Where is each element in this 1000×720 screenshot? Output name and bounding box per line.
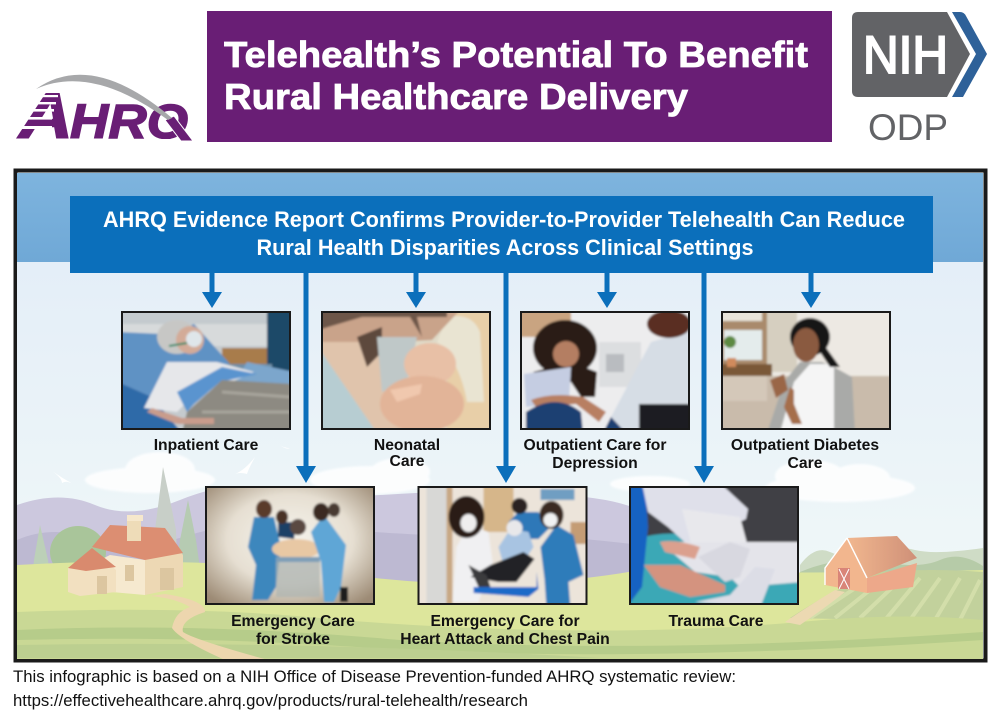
title banner: Telehealth’s Potential To Benefit [224, 34, 808, 75]
arrow: to emergency heart care [496, 273, 516, 483]
logo: AHRQ: HRQ [70, 96, 188, 149]
title banner: Rural Healthcare Delivery [224, 76, 688, 117]
photo: neonatal care [318, 308, 494, 433]
arrow: to inpatient care [202, 273, 222, 308]
label: outpatient diabetes care: Outpatient Diabetes [731, 437, 879, 454]
photo: trauma care [626, 483, 802, 608]
footer source note: https://effectivehealthcare.ahrq.gov/products/rural-telehealth/research [13, 691, 528, 710]
logo: NIH ODP [852, 12, 987, 148]
label: outpatient care for depression: Depression [552, 455, 638, 472]
header banner [70, 196, 933, 273]
photo: outpatient diabetes care [718, 308, 894, 433]
photo: emergency care for heart attack and chest pain [414, 483, 590, 608]
label: inpatient care: Inpatient Care [154, 437, 259, 454]
label: emergency care for heart attack and chest pain: Heart Attack and Chest Pain [400, 631, 610, 648]
label: emergency care for heart attack and chest pain: Emergency Care for [430, 613, 580, 630]
label: emergency care for stroke: Emergency Care [231, 613, 355, 630]
label: outpatient diabetes care: Care [788, 455, 823, 472]
logo: AHRQ [16, 74, 192, 140]
title banner [207, 11, 832, 142]
photo: inpatient care [118, 308, 294, 433]
arrow: to neonatal care [406, 273, 426, 308]
label: trauma care: Trauma Care [668, 613, 764, 630]
logo: NIH ODP: NIH [863, 26, 948, 85]
logo: NIH ODP: ODP [868, 107, 948, 148]
label: neonatal care: Care [390, 453, 425, 470]
label: outpatient care for depression: Outpatient Care for [524, 437, 666, 454]
footer source note [13, 667, 736, 710]
icon: farmhouse [68, 515, 183, 596]
arrow: to emergency stroke care [296, 273, 316, 483]
arrow: to outpatient depression care [597, 273, 617, 308]
icon: red barn [825, 536, 917, 593]
footer source note: This infographic is based on a NIH Office of Disease Prevention-funded AHRQ systematic review: [13, 667, 736, 686]
logo: AHRQ: A [17, 80, 73, 152]
label: neonatal care: Neonatal [374, 437, 440, 454]
photo: emergency care for stroke [202, 483, 378, 608]
header banner: AHRQ Evidence Report Confirms Provider-to-Provider Telehealth Can Reduce [103, 207, 905, 232]
header banner: Rural Health Disparities Across Clinical Settings [256, 235, 754, 260]
panel: rural landscape background [16, 170, 986, 660]
arrow: to outpatient diabetes care [801, 273, 821, 308]
arrow: to trauma care [694, 273, 714, 483]
photo: outpatient care for depression [517, 308, 693, 433]
label: emergency care for stroke: for Stroke [256, 631, 330, 648]
